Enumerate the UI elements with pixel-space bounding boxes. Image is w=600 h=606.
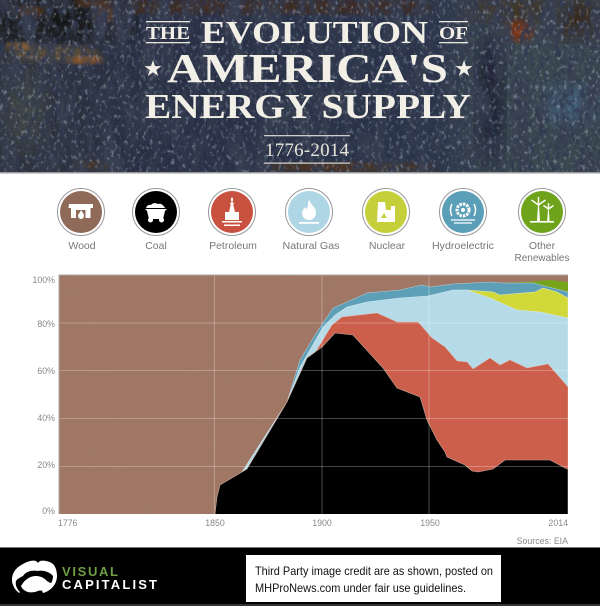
title line 1 bbox=[146, 14, 468, 50]
date range: 1776-2014 bbox=[265, 140, 350, 161]
logo mark bbox=[12, 561, 57, 593]
legend icons: Renewables bbox=[514, 252, 570, 264]
image credit box: MHProNews.com under fair use guidelines. bbox=[255, 581, 466, 595]
title line 1: EVOLUTION bbox=[201, 14, 428, 50]
y axis labels: 40% bbox=[37, 413, 55, 423]
label: wood: Wood bbox=[68, 240, 96, 252]
header bottom edge bbox=[0, 172, 600, 174]
header: rusted metal background bbox=[0, 0, 600, 172]
y axis labels: 20% bbox=[37, 460, 55, 470]
y axis labels: 0% bbox=[42, 506, 55, 516]
x axis labels: 1900 bbox=[312, 518, 332, 528]
title line 2 with stars: ★ bbox=[144, 59, 162, 80]
plot areas bbox=[59, 275, 568, 515]
area: wood bbox=[59, 275, 568, 514]
title line 2 with stars: AMERICA'S bbox=[167, 45, 448, 91]
logo: visual capitalist bbox=[12, 561, 157, 593]
label: other renewables: Other bbox=[529, 240, 556, 252]
y axis labels: 80% bbox=[37, 319, 55, 329]
footer band bbox=[0, 547, 600, 606]
icon: petroleum bbox=[208, 188, 256, 236]
icon: coal bbox=[132, 188, 180, 236]
icon: wood bbox=[58, 188, 104, 236]
icon: hydroelectric bbox=[440, 188, 486, 236]
x axis labels: 1950 bbox=[420, 518, 440, 528]
chart gridlines bbox=[59, 275, 568, 514]
title line 3: ENERGY SUPPLY bbox=[145, 87, 471, 126]
x axis labels bbox=[58, 518, 568, 528]
icon: other renewables bbox=[518, 188, 566, 236]
image credit box bbox=[246, 555, 501, 602]
title line 1: OF bbox=[439, 23, 468, 43]
icon: natural gas bbox=[286, 188, 332, 236]
area: other renewables bbox=[506, 280, 568, 292]
area: nuclear bbox=[467, 288, 568, 318]
area: coal bbox=[215, 333, 568, 515]
x axis labels: 1776 bbox=[58, 518, 78, 528]
source note: Sources: EIA bbox=[517, 536, 568, 546]
title line 2 with stars: ★ bbox=[455, 59, 473, 80]
title line 1: THE bbox=[146, 23, 190, 43]
area: natural gas bbox=[242, 290, 568, 472]
y axis labels: 100% bbox=[32, 275, 55, 285]
chart border bbox=[59, 275, 568, 514]
y axis labels bbox=[32, 275, 55, 516]
label: nuclear: Nuclear bbox=[369, 240, 406, 252]
area: petroleum bbox=[290, 312, 568, 472]
y axis labels: 60% bbox=[37, 366, 55, 376]
icon: nuclear bbox=[362, 188, 410, 236]
title bbox=[144, 14, 473, 126]
label: hydroelectric: Hydroelectric bbox=[432, 240, 494, 252]
legend icons bbox=[58, 188, 570, 264]
label: natural gas: Natural Gas bbox=[282, 240, 340, 252]
area: hydroelectric bbox=[242, 282, 568, 472]
logo wordmark: VISUAL bbox=[62, 564, 118, 579]
x axis labels: 1850 bbox=[205, 518, 225, 528]
stacked area chart bbox=[32, 275, 568, 546]
image credit box: Third Party image credit are as shown, posted on bbox=[255, 564, 493, 578]
logo: visual capitalist: CAPITALIST bbox=[62, 577, 157, 592]
x axis labels: 2014 bbox=[548, 518, 568, 528]
label: petroleum: Petroleum bbox=[209, 240, 257, 252]
label: coal: Coal bbox=[145, 240, 167, 252]
